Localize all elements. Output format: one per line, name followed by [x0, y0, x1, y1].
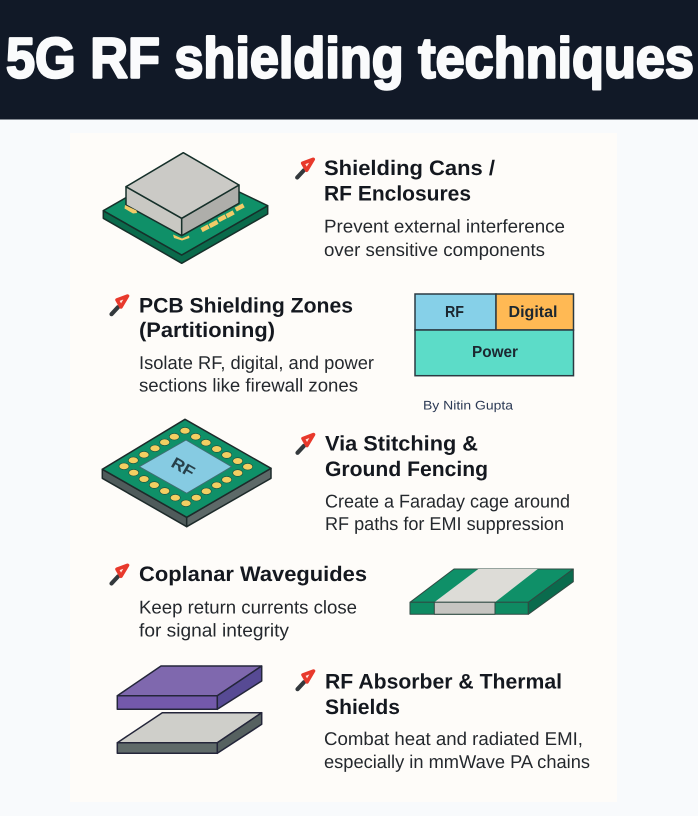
panel: main card	[70, 133, 617, 802]
heading	[325, 670, 562, 719]
description: Combat heat and radiated EMI,	[324, 728, 583, 749]
diagram: partition zones: RF	[445, 304, 464, 321]
icon: pin	[297, 159, 313, 178]
description: RF paths for EMI suppression	[325, 513, 564, 534]
description	[325, 490, 570, 534]
section: PCB shielding zones	[112, 294, 574, 412]
description	[324, 728, 590, 772]
header banner	[0, 0, 698, 120]
description: Prevent external interference	[324, 216, 565, 237]
description	[139, 352, 374, 396]
heading: Via Stitching &	[325, 433, 478, 456]
description: over sensitive components	[324, 239, 545, 260]
section: via stitching	[102, 419, 570, 534]
heading: (Partitioning)	[139, 319, 275, 342]
description	[139, 596, 357, 641]
icon: absorber and thermal layers	[117, 666, 262, 753]
description: Create a Faraday cage around	[325, 490, 570, 511]
icon: pin	[298, 671, 314, 689]
icon: pin	[112, 296, 128, 314]
icon: coplanar waveguide	[410, 569, 573, 614]
heading: Shielding Cans /	[324, 157, 495, 180]
icon: via stitched board	[102, 419, 271, 527]
heading: Shields	[325, 696, 400, 719]
description: for signal integrity	[139, 620, 290, 641]
diagram: partition zones: Power	[472, 344, 518, 361]
heading: Coplanar Waveguides	[139, 563, 367, 586]
icon: shielding can on PCB	[103, 153, 268, 263]
heading: PCB Shielding Zones	[139, 294, 353, 317]
description: especially in mmWave PA chains	[324, 751, 590, 772]
diagram: partition zones: Digital	[508, 304, 558, 321]
heading	[325, 433, 488, 481]
description: Isolate RF, digital, and power	[139, 352, 374, 373]
diagram: partition zones	[415, 294, 574, 376]
heading: RF Absorber & Thermal	[325, 670, 562, 693]
author credit: By Nitin Gupta	[423, 398, 513, 412]
heading: Ground Fencing	[325, 458, 488, 481]
heading	[139, 294, 353, 342]
icon: pin	[112, 565, 128, 584]
heading: RF Enclosures	[324, 183, 471, 206]
description: sections like firewall zones	[139, 375, 358, 396]
description: Keep return currents close	[139, 596, 357, 617]
heading	[324, 157, 495, 206]
description	[324, 216, 565, 260]
icon: pin	[298, 435, 314, 453]
section: coplanar waveguides	[112, 563, 573, 641]
section: RF absorber and thermal shields	[117, 666, 590, 772]
icon: via stitched board: RF	[168, 455, 198, 482]
section: shielding cans	[103, 153, 565, 263]
